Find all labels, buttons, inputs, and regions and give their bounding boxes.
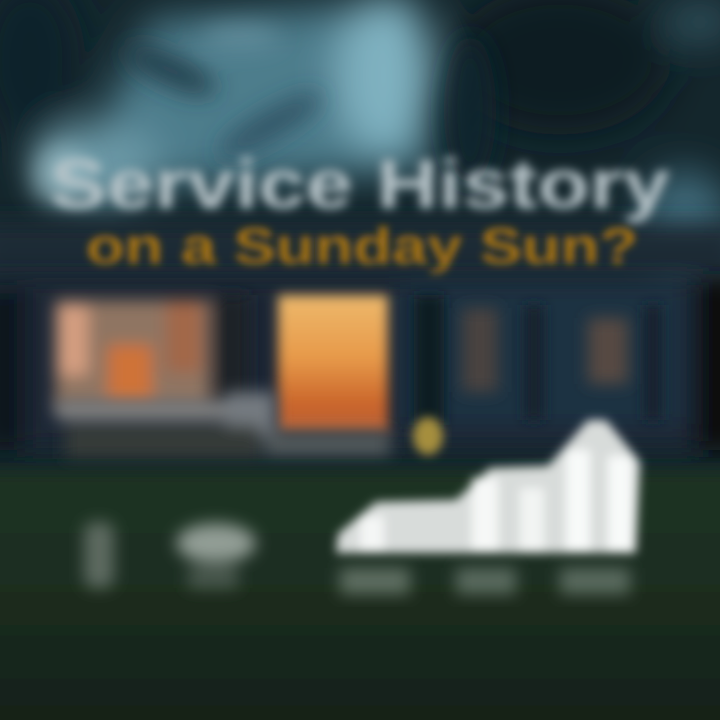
house facade (0, 278, 720, 459)
left stat: value and caption: 20% (186, 528, 246, 561)
right window two (588, 318, 628, 384)
icon: yellow coin (413, 417, 443, 455)
right window one (462, 308, 498, 392)
porch and steps (55, 392, 390, 459)
subtitle: orange heading: on a Sunday Sun? (86, 218, 638, 276)
left stat: small figure (84, 522, 114, 588)
lawn (0, 470, 720, 720)
left window (55, 295, 249, 405)
sky background (0, 0, 720, 480)
chart axis labels (340, 568, 630, 594)
bar chart: rising white bars (336, 420, 640, 553)
left stat: value and caption (176, 523, 256, 588)
front door (278, 295, 388, 433)
title: main heading: Service History (50, 145, 670, 223)
dark band behind headings (0, 222, 720, 282)
